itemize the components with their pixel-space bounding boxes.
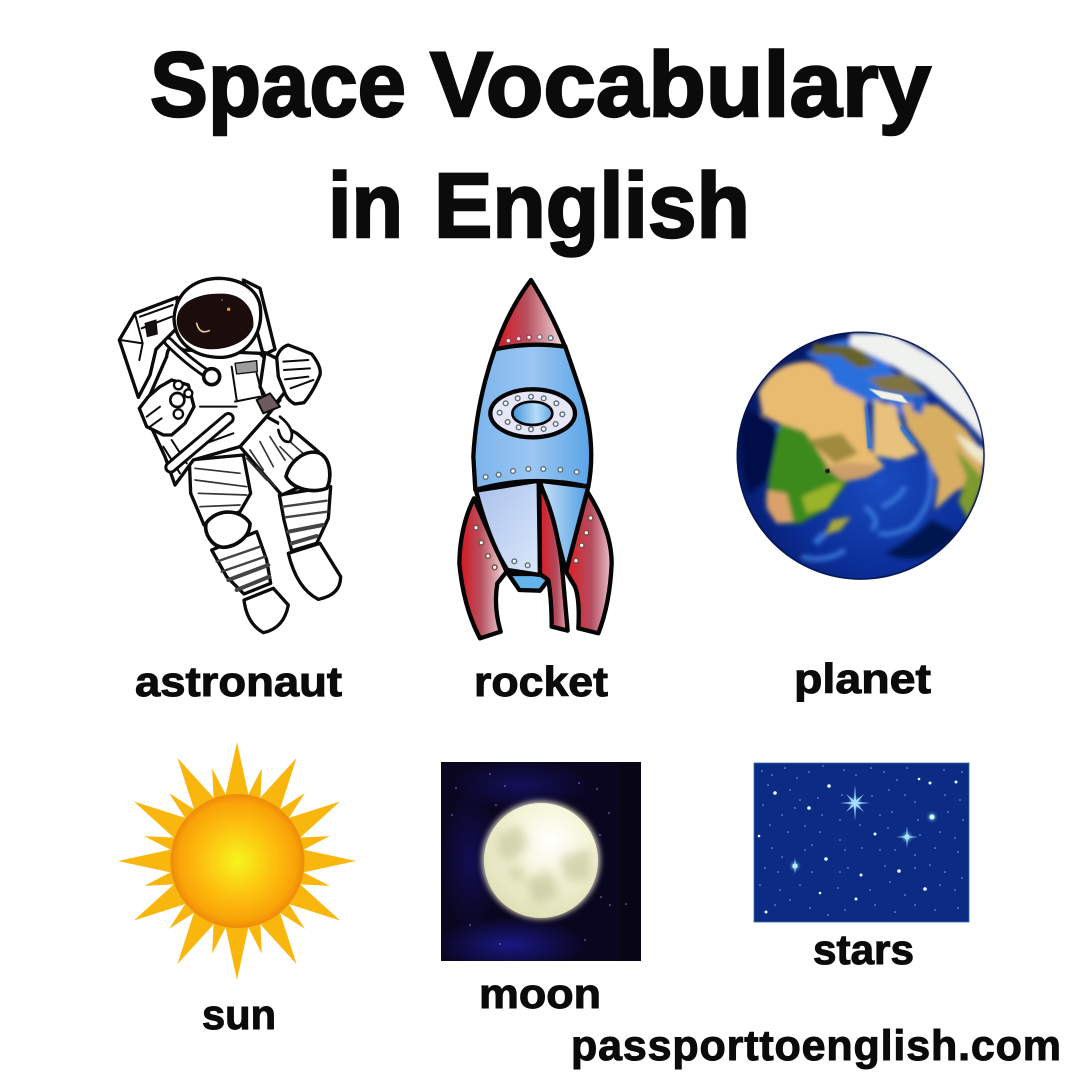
Madagascar (824, 517, 851, 535)
rocket right fin (566, 492, 612, 633)
small stars (760, 766, 963, 915)
moon (482, 801, 600, 919)
Asia (902, 403, 984, 510)
panel: stars picture (754, 763, 969, 922)
title: in (328, 155, 403, 257)
label: sun: sun (202, 991, 276, 1038)
astronaut fist (277, 345, 320, 404)
label: planet: planet (794, 655, 931, 702)
rocket lower right panel (539, 481, 588, 572)
astronaut hoses (168, 342, 228, 467)
label: stars: stars (813, 926, 914, 973)
backpack (119, 280, 275, 397)
Arabia (873, 400, 919, 460)
rocket left fin (459, 498, 507, 638)
website credit: passporttoenglish.com (571, 1022, 1061, 1070)
astronaut torso (143, 346, 292, 485)
astronaut legs (189, 417, 341, 633)
rocket nozzle (508, 574, 548, 591)
bright stars (758, 778, 958, 914)
icon: astronaut (119, 278, 341, 633)
title: Vocabulary (430, 34, 931, 136)
title (150, 34, 931, 257)
ocean highlights (772, 427, 931, 559)
sun rays (118, 742, 356, 980)
star glows (792, 798, 936, 870)
sea and land details (825, 388, 917, 473)
rocket body (473, 344, 591, 490)
polar clouds (850, 333, 988, 443)
rocket window (490, 389, 575, 437)
star sparkles (794, 785, 918, 874)
astronaut helmet (174, 278, 261, 357)
title: Space (150, 34, 406, 136)
icon: sun (118, 742, 356, 980)
rocket centre fin (539, 483, 568, 631)
label: moon: moon (479, 970, 601, 1017)
rocket nose cone (495, 280, 565, 349)
label: rocket: rocket (474, 658, 608, 705)
sun disc (170, 794, 304, 928)
panel: moon picture (435, 759, 641, 973)
Europe (812, 343, 877, 368)
astronaut glove (139, 380, 194, 435)
icon: planet earth (737, 332, 988, 580)
rocket rivets (474, 335, 593, 570)
label: astronaut: astronaut (135, 658, 342, 705)
Africa (758, 362, 884, 482)
title: English (434, 155, 750, 257)
icon: rocket (459, 280, 612, 638)
rocket lower left panel (476, 481, 540, 575)
